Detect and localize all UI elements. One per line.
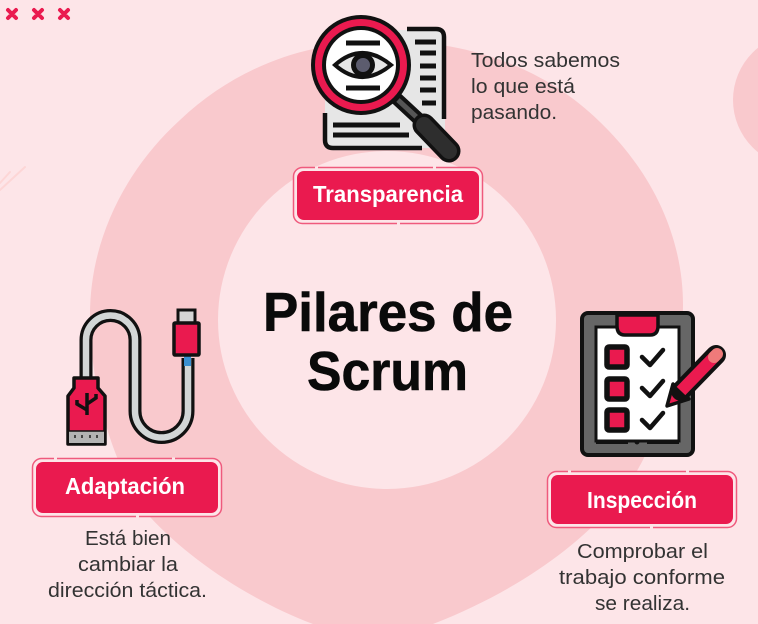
button: Adaptación: Adaptación (65, 473, 185, 499)
text: transparencia description: lo que está (471, 76, 576, 98)
button: Transparencia: Transparencia (313, 181, 463, 207)
text: inspección description: trabajo conforme (559, 567, 725, 589)
text: inspección description: se realiza. (595, 593, 690, 615)
text: transparencia description (471, 50, 620, 124)
icon: usb cable (68, 310, 199, 444)
button: Inspección: Inspección (587, 487, 697, 513)
inner circle (218, 151, 556, 489)
text: adaptación description: Está bien (85, 528, 171, 550)
background ring blob (90, 41, 683, 624)
text: adaptación description: dirección táctica. (48, 580, 207, 602)
icon: magnifying glass over document (311, 15, 449, 151)
text: inspección description (559, 541, 725, 615)
text: transparencia description: Todos sabemos (471, 50, 620, 72)
title: Scrum (307, 340, 468, 402)
text: adaptación description (48, 528, 207, 602)
title (263, 281, 513, 402)
text: adaptación description: cambiar la (78, 554, 179, 576)
corner circle (733, 33, 758, 167)
text: transparencia description: pasando. (471, 102, 557, 124)
text: inspección description: Comprobar el (577, 541, 708, 563)
decorative x marks (8, 10, 68, 18)
button: Adaptación (32, 458, 222, 516)
icon: clipboard checklist (580, 311, 717, 457)
decorative streaks (0, 167, 25, 190)
button: Inspección (548, 472, 736, 528)
button: Transparencia (294, 168, 482, 224)
title: Pilares de (263, 281, 513, 343)
